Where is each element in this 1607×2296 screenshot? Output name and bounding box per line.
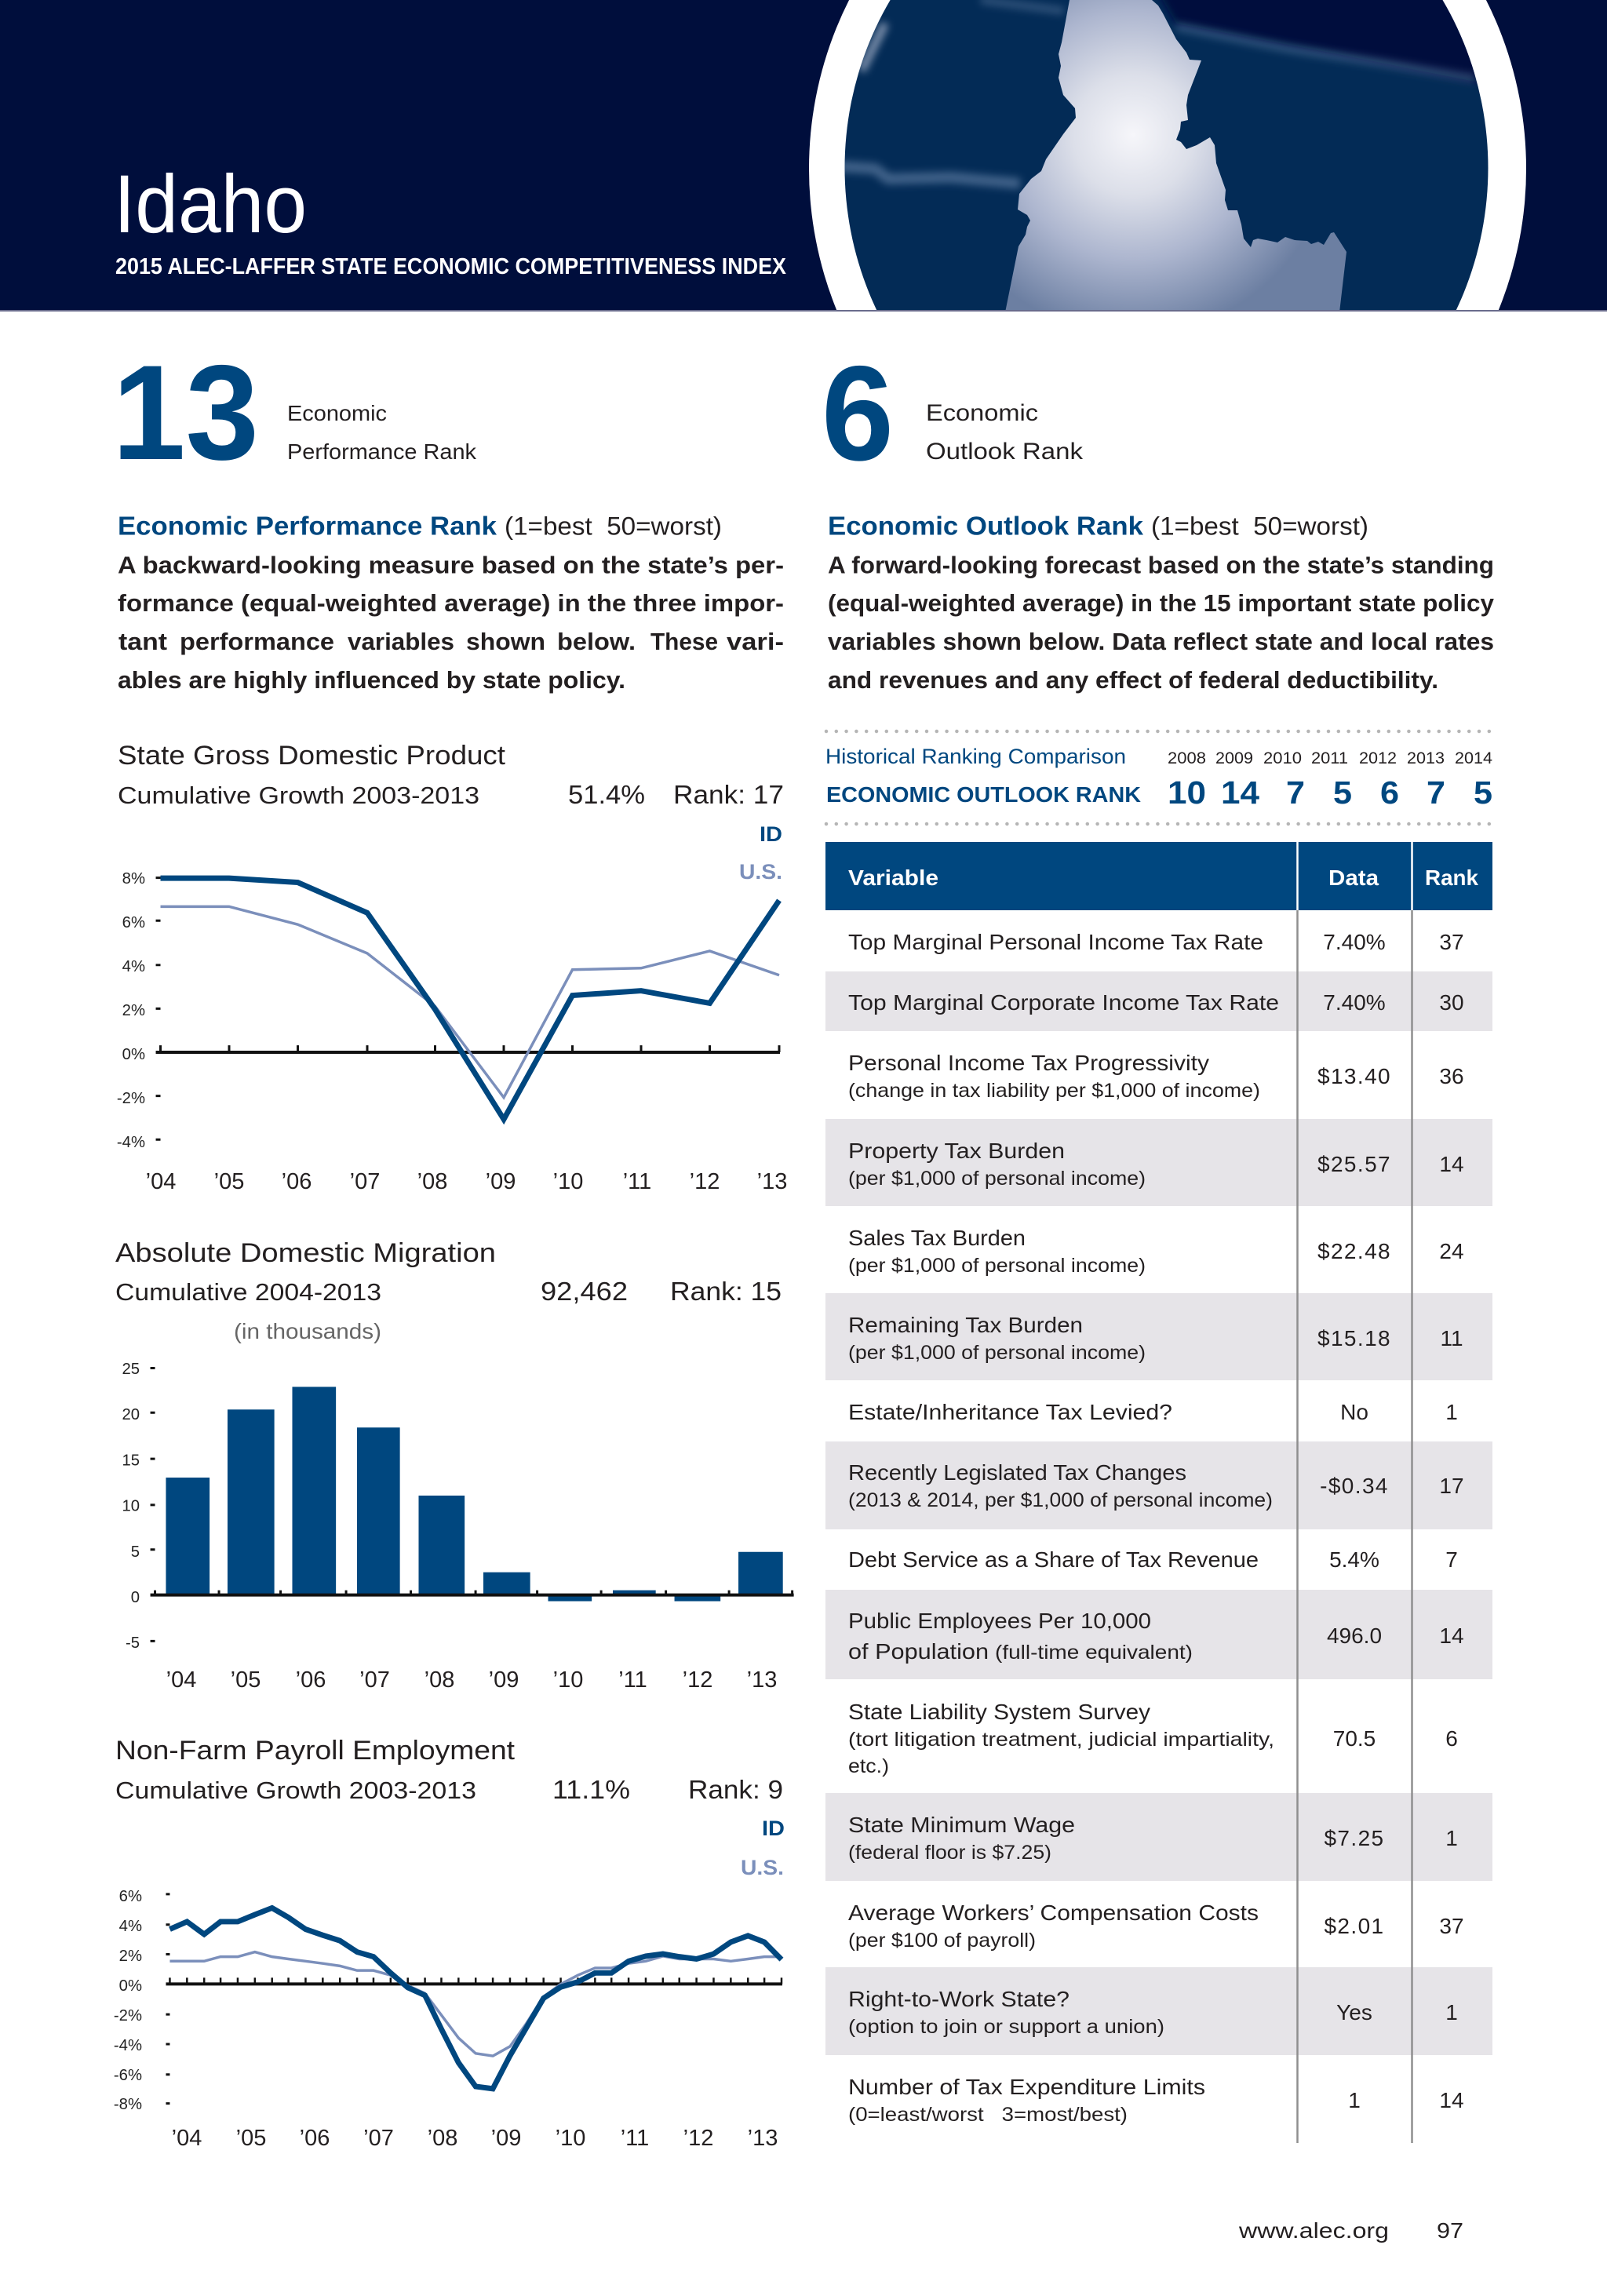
- stats row: Cumulative Growth 2003-2013: [118, 782, 479, 809]
- row: state minimum wage: [848, 1813, 1458, 1864]
- row: state minimum wage: $7.25: [1324, 1826, 1385, 1850]
- row: debt service: 5.4%: [1329, 1547, 1379, 1572]
- row: top marginal personal income tax rate: 7.40%: [1323, 930, 1386, 954]
- row: sales tax burden: (per $1,000 of personal income): [848, 1255, 1146, 1277]
- row: personal income tax progressivity: [848, 1051, 1464, 1102]
- legend: [741, 1817, 785, 1879]
- row: top marginal corporate income tax rate: 7.40%: [1323, 990, 1386, 1015]
- bar chart: migration: -5: [126, 1635, 140, 1652]
- row: personal income tax progressivity: 36: [1439, 1064, 1464, 1088]
- year labels: 2010: [1263, 749, 1302, 767]
- stats row: Rank: 9: [688, 1775, 783, 1804]
- row: recently legislated tax changes: (2013 & 2014, per $1,000 of personal income): [848, 1489, 1273, 1511]
- bar chart: migration: [122, 1361, 794, 1693]
- stats row: 51.4%: [568, 780, 645, 809]
- row: state liability system survey: 70.5: [1333, 1726, 1376, 1751]
- line chart: employment growth: ’11: [621, 2126, 649, 2151]
- panel: non-farm payroll employment: [114, 1736, 785, 2151]
- row: property tax burden: $25.57: [1317, 1152, 1391, 1176]
- bar chart: migration: 0: [131, 1589, 140, 1606]
- text block: economic performance description: A backward-looking measure based on the state’s per-: [118, 552, 784, 579]
- row: sales tax burden: 24: [1439, 1239, 1464, 1263]
- text block: economic performance description: variables: [348, 629, 454, 655]
- row: state liability system survey: (tort litigation treatment, judicial impartiality,: [848, 1729, 1274, 1751]
- bar chart: migration: ’07: [359, 1667, 390, 1693]
- label: economic outlook rank: ECONOMIC OUTLOOK RANK: [826, 782, 1141, 807]
- row: sales tax burden: [848, 1226, 1464, 1277]
- row: public employees: (full-time equivalent): [995, 1642, 1193, 1664]
- row: personal income tax progressivity: $13.40: [1317, 1064, 1391, 1088]
- text block: economic outlook description: variables shown below. Data reflect state and local rates: [828, 629, 1494, 655]
- line chart: employment growth: ’09: [491, 2126, 521, 2151]
- economic outlook rank number: Economic: [926, 400, 1038, 426]
- legend: ID: [760, 822, 782, 846]
- line chart: GDP growth: -2%: [117, 1090, 145, 1107]
- year labels: 2013: [1407, 749, 1445, 767]
- row: property tax burden: Property Tax Burden: [848, 1139, 1065, 1163]
- line chart: GDP growth: ’07: [350, 1169, 380, 1194]
- row: recently legislated tax changes: Recently Legislated Tax Changes: [848, 1460, 1186, 1485]
- line chart: GDP growth: ’04: [146, 1169, 176, 1194]
- row: public employees: 14: [1439, 1624, 1464, 1648]
- line chart: employment growth: ’10: [556, 2126, 585, 2151]
- row: property tax burden: (per $1,000 of personal income): [848, 1168, 1146, 1190]
- bar chart: migration: 20: [122, 1406, 140, 1423]
- row: state minimum wage: (federal floor is $7.25): [848, 1842, 1051, 1864]
- stats row: [115, 1277, 782, 1306]
- row: debt service: 7: [1445, 1547, 1458, 1572]
- row: top marginal personal income tax rate: 37: [1439, 930, 1464, 954]
- line chart: GDP growth: -4%: [117, 1134, 145, 1151]
- row: average workers compensation costs: 37: [1439, 1914, 1464, 1938]
- row: average workers compensation costs: $2.01: [1324, 1914, 1385, 1938]
- row: state liability system survey: State Liability System Survey: [848, 1700, 1150, 1724]
- row: number of tax expenditure limits: Number of Tax Expenditure Limits: [848, 2075, 1205, 2099]
- unit note: (in thousands): [234, 1319, 381, 1343]
- row: state liability system survey: etc.): [848, 1755, 889, 1777]
- text block: economic performance description: below.: [557, 629, 636, 655]
- year labels: [1168, 749, 1492, 767]
- rank values: 10: [1168, 774, 1206, 811]
- line chart: GDP growth: 2%: [122, 1002, 145, 1019]
- title: Idaho: [114, 159, 307, 250]
- economic performance rank number: [112, 337, 477, 488]
- legend: [739, 822, 782, 884]
- row: remaining tax burden: 11: [1440, 1326, 1463, 1350]
- text block: economic outlook description: and revenues and any effect of federal deductibility.: [828, 667, 1438, 694]
- line chart: GDP growth: 0%: [122, 1046, 145, 1063]
- text block: economic performance description: Economic Performance Rank: [118, 512, 497, 541]
- economic performance rank number: 13: [112, 337, 259, 488]
- text block: economic performance description: tant: [118, 629, 167, 655]
- year labels: 2011: [1311, 749, 1348, 767]
- row: number of tax expenditure limits: 14: [1439, 2088, 1464, 2112]
- bar chart: migration: ’04: [166, 1667, 196, 1693]
- line chart: employment growth: 0%: [119, 1977, 142, 1995]
- bar chart: migration: ’08: [425, 1667, 454, 1693]
- bar chart: migration: ’05: [231, 1667, 261, 1693]
- row: state liability system survey: [848, 1700, 1458, 1777]
- row: estate/inheritance tax levied: Estate/Inheritance Tax Levied?: [848, 1400, 1172, 1424]
- bar chart: migration: ’09: [489, 1667, 519, 1693]
- line chart: GDP growth: 6%: [122, 914, 145, 931]
- line chart: employment growth: ’12: [683, 2126, 713, 2151]
- line chart: GDP growth: ’11: [623, 1169, 651, 1194]
- row: remaining tax burden: (per $1,000 of personal income): [848, 1342, 1146, 1364]
- row: estate/inheritance tax levied: No: [1340, 1400, 1368, 1424]
- panel: state gross domestic product: [117, 741, 787, 1194]
- line chart: employment growth: 6%: [119, 1888, 142, 1905]
- row: state liability system survey: 6: [1445, 1726, 1458, 1751]
- row: top marginal personal income tax rate: Top Marginal Personal Income Tax Rate: [848, 930, 1263, 954]
- row: right-to-work state: Right-to-Work State?: [848, 1987, 1070, 2011]
- economic outlook rank number: 6: [822, 338, 894, 489]
- stats row: Rank: 15: [670, 1277, 782, 1306]
- year labels: 2014: [1455, 749, 1492, 767]
- row: right-to-work state: (option to join or support a union): [848, 2016, 1164, 2038]
- line chart: employment growth: [114, 1888, 782, 2151]
- row: debt service: Debt Service as a Share of Tax Revenue: [848, 1547, 1259, 1572]
- rank values: 5: [1333, 774, 1352, 811]
- row: estate/inheritance tax levied: 1: [1445, 1400, 1458, 1424]
- line chart: GDP growth: ’12: [690, 1169, 720, 1194]
- row: remaining tax burden: [848, 1313, 1463, 1364]
- row: top marginal corporate income tax rate: 30: [1439, 990, 1464, 1015]
- heading: State Gross Domestic Product: [118, 741, 506, 771]
- row: right-to-work state: Yes: [1336, 2000, 1372, 2024]
- stats row: 11.1%: [552, 1775, 630, 1804]
- text block: economic outlook description: (equal-weighted average) in the 15 important state policy: [828, 590, 1494, 617]
- year labels: 2008: [1168, 749, 1206, 767]
- row: property tax burden: [848, 1139, 1464, 1190]
- row: property tax burden: 14: [1439, 1152, 1464, 1176]
- footer: www.alec.org: [1238, 2218, 1389, 2243]
- rank values: 6: [1380, 774, 1399, 811]
- rank values: 14: [1221, 774, 1259, 811]
- heading: Absolute Domestic Migration: [115, 1238, 496, 1268]
- row: state minimum wage: State Minimum Wage: [848, 1813, 1075, 1837]
- stats row: [115, 1775, 783, 1804]
- economic performance rank number: Performance Rank: [287, 439, 477, 464]
- text block: economic performance description: performance: [180, 629, 334, 655]
- text block: economic performance description: vari-: [727, 629, 784, 655]
- stats row: [118, 780, 784, 809]
- row: top marginal corporate income tax rate: Top Marginal Corporate Income Tax Rate: [848, 990, 1279, 1015]
- table header: [825, 842, 1492, 910]
- text block: economic performance description: ables are highly influenced by state policy.: [118, 667, 625, 694]
- text block: economic outlook description: Economic Outlook Rank: [828, 512, 1143, 541]
- line chart: GDP growth: ’10: [553, 1169, 583, 1194]
- stats row: 92,462: [541, 1277, 628, 1306]
- line chart: GDP growth: ’05: [214, 1169, 244, 1194]
- line chart: GDP growth: [117, 870, 787, 1194]
- year labels: 2012: [1359, 749, 1397, 767]
- row: debt service: [848, 1547, 1458, 1572]
- row: recently legislated tax changes: 17: [1439, 1474, 1464, 1498]
- rank values: 5: [1474, 774, 1492, 811]
- footer: [1238, 2218, 1463, 2243]
- row: public employees: 496.0: [1327, 1624, 1382, 1648]
- row: top marginal corporate income tax rate: [848, 990, 1464, 1015]
- stats row: Rank: 17: [673, 780, 784, 809]
- heading: Non-Farm Payroll Employment: [115, 1736, 516, 1766]
- line chart: GDP growth: 8%: [122, 870, 145, 887]
- text block: economic performance description: [118, 512, 784, 694]
- line chart: employment growth: ’04: [172, 2126, 202, 2151]
- row: personal income tax progressivity: Personal Income Tax Progressivity: [848, 1051, 1209, 1075]
- bar chart: migration: ’06: [296, 1667, 326, 1693]
- row: recently legislated tax changes: -$0.34: [1320, 1474, 1389, 1498]
- rank values: [1168, 774, 1492, 811]
- bar chart: migration: ’13: [747, 1667, 777, 1693]
- legend: U.S.: [741, 1856, 784, 1879]
- footer: 97: [1437, 2218, 1463, 2243]
- economic outlook rank number: [822, 338, 1084, 489]
- text block: economic performance description: (1=best 50=worst): [505, 512, 722, 540]
- stats row: Cumulative 2004-2013: [115, 1278, 381, 1306]
- line chart: GDP growth: 4%: [122, 958, 145, 975]
- panel: absolute domestic migration: [115, 1238, 794, 1693]
- label: historical ranking comparison: Historical Ranking Comparison: [825, 745, 1126, 768]
- table header: Data: [1328, 866, 1379, 890]
- rank values: 7: [1427, 774, 1445, 811]
- line chart: employment growth: ’07: [363, 2126, 394, 2151]
- legend: ID: [762, 1817, 785, 1840]
- rank values: 7: [1286, 774, 1305, 811]
- bar chart: migration: 10: [122, 1498, 140, 1515]
- text block: economic performance description: shown: [466, 629, 545, 655]
- row: average workers compensation costs: (per $100 of payroll): [848, 1930, 1036, 1952]
- line chart: GDP growth: ’09: [486, 1169, 516, 1194]
- row: sales tax burden: Sales Tax Burden: [848, 1226, 1026, 1250]
- economic outlook rank number: Outlook Rank: [926, 439, 1084, 465]
- icon: state of Idaho in oval: [809, 0, 1526, 310]
- line chart: employment growth: ’06: [300, 2126, 330, 2151]
- stats row: Cumulative Growth 2003-2013: [115, 1777, 476, 1804]
- legend: U.S.: [739, 860, 782, 884]
- row: personal income tax progressivity: (change in tax liability per $1,000 of income): [848, 1080, 1260, 1102]
- line chart: employment growth: ’05: [236, 2126, 266, 2151]
- row: top marginal personal income tax rate: [848, 930, 1464, 954]
- panel: historical ranking comparison: [825, 731, 1492, 824]
- line chart: employment growth: -2%: [114, 2007, 142, 2024]
- bar chart: migration: ’10: [553, 1667, 583, 1693]
- header banner: [0, 0, 1607, 312]
- row: number of tax expenditure limits: (0=least/worst 3=most/best): [848, 2104, 1128, 2126]
- row: public employees: Public Employees Per 10,000: [848, 1609, 1151, 1633]
- row: average workers compensation costs: Average Workers’ Compensation Costs: [848, 1901, 1259, 1925]
- row: right-to-work state: [848, 1987, 1458, 2038]
- table: variables: [825, 842, 1492, 2143]
- line chart: employment growth: ’08: [428, 2126, 457, 2151]
- line chart: employment growth: 4%: [119, 1918, 142, 1935]
- bar chart: migration: 5: [131, 1543, 140, 1561]
- year labels: 2009: [1215, 749, 1253, 767]
- row: remaining tax burden: Remaining Tax Burden: [848, 1313, 1083, 1337]
- bar chart: migration: 15: [122, 1452, 140, 1469]
- line chart: GDP growth: ’06: [282, 1169, 312, 1194]
- line chart: GDP growth: ’08: [417, 1169, 447, 1194]
- row: public employees: of Population: [848, 1639, 989, 1664]
- table header: Rank: [1425, 866, 1478, 890]
- row: recently legislated tax changes: [848, 1460, 1464, 1511]
- line chart: employment growth: 2%: [119, 1948, 142, 1965]
- row: public employees: [848, 1609, 1464, 1664]
- text block: economic outlook description: [828, 512, 1494, 694]
- bar chart: migration: ’12: [683, 1667, 712, 1693]
- table header: Variable: [848, 866, 938, 890]
- line chart: employment growth: ’13: [748, 2126, 778, 2151]
- row: average workers compensation costs: [848, 1901, 1464, 1952]
- line chart: employment growth: -4%: [114, 2037, 142, 2054]
- text block: economic performance description: formance (equal-weighted average) in the three impor-: [118, 590, 784, 617]
- bar chart: migration: 25: [122, 1361, 140, 1378]
- subtitle: 2015 ALEC-LAFFER STATE ECONOMIC COMPETITIVENESS INDEX: [115, 254, 786, 279]
- row: right-to-work state: 1: [1445, 2000, 1458, 2024]
- row: sales tax burden: $22.48: [1317, 1239, 1391, 1263]
- line chart: GDP growth: ’13: [757, 1169, 787, 1194]
- bar chart: migration: ’11: [618, 1667, 647, 1693]
- row: number of tax expenditure limits: 1: [1348, 2088, 1361, 2112]
- text block: economic outlook description: A forward-looking forecast based on the state’s standing: [828, 552, 1494, 579]
- economic performance rank number: Economic: [287, 401, 387, 425]
- row: number of tax expenditure limits: [848, 2075, 1464, 2126]
- text block: economic performance description: These: [650, 629, 718, 655]
- text block: economic outlook description: (1=best 50=worst): [1151, 512, 1368, 540]
- row: state minimum wage: 1: [1445, 1826, 1458, 1850]
- line chart: employment growth: -6%: [114, 2067, 142, 2084]
- line chart: employment growth: -8%: [114, 2096, 142, 2113]
- row: remaining tax burden: $15.18: [1317, 1326, 1391, 1350]
- row: estate/inheritance tax levied: [848, 1400, 1458, 1424]
